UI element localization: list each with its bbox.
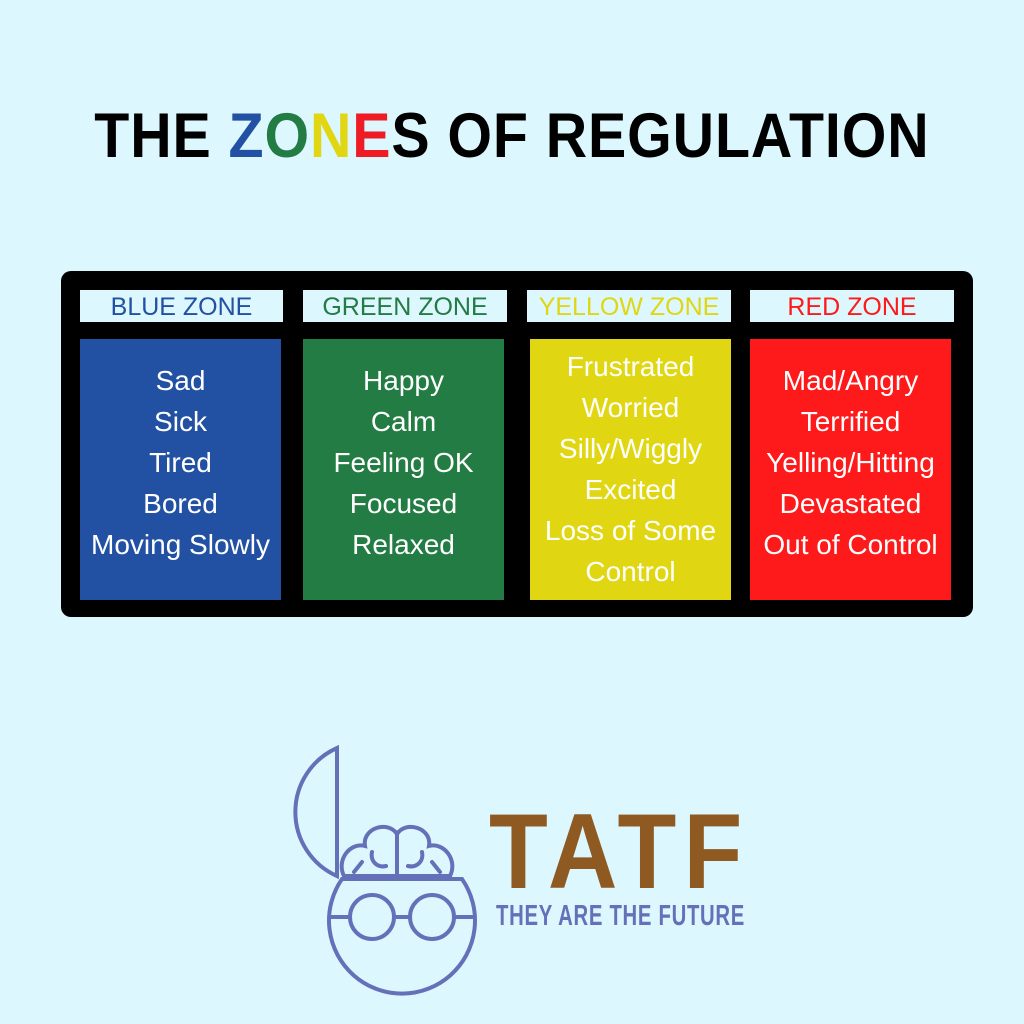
box: red zone feelings: Terrified [801, 406, 900, 437]
box: green zone feelings: Feeling OK [333, 447, 474, 478]
box: red zone feelings: Out of Control [763, 529, 938, 560]
box: red zone feelings: Mad/Angry [783, 365, 918, 396]
box: red zone feelings: Yelling/Hitting [766, 447, 935, 478]
box: green zone feelings: Relaxed [352, 529, 455, 560]
header: blue zone: BLUE ZONE [111, 293, 252, 321]
header: green zone: GREEN ZONE [322, 293, 488, 321]
icon: logo head [293, 744, 477, 996]
box: blue zone feelings: Tired [149, 447, 212, 478]
panel: zones [61, 271, 973, 617]
box: yellow zone feelings: Control [585, 556, 676, 587]
box: blue zone feelings: Sad [156, 365, 205, 396]
box: yellow zone feelings [530, 339, 731, 600]
box: yellow zone feelings: Frustrated [567, 351, 694, 382]
box: green zone feelings: Calm [371, 406, 436, 437]
box: green zone feelings [303, 339, 504, 600]
box: blue zone feelings: Moving Slowly [91, 529, 270, 560]
header: yellow zone: YELLOW ZONE [539, 293, 719, 321]
box: green zone feelings: Focused [350, 488, 457, 519]
box: blue zone feelings [80, 339, 281, 600]
header: red zone: RED ZONE [787, 293, 917, 321]
box: yellow zone feelings: Silly/Wiggly [559, 433, 702, 464]
box: red zone feelings [750, 339, 951, 600]
box: red zone feelings: Devastated [780, 488, 921, 519]
box: yellow zone feelings: Worried [582, 392, 679, 423]
title: THE ZONES OF REGULATION [94, 101, 930, 171]
box: yellow zone feelings: Excited [585, 474, 676, 505]
box: blue zone feelings: Bored [143, 488, 218, 519]
box: yellow zone feelings: Loss of Some [545, 515, 716, 546]
header: blue zone [80, 290, 283, 322]
header: red zone [750, 290, 954, 322]
logo text: TATF: TATF [489, 791, 750, 911]
box: blue zone feelings: Sick [154, 406, 207, 437]
box: green zone feelings: Happy [363, 365, 444, 396]
logo tagline: THEY ARE THE FUTURE [496, 900, 745, 932]
